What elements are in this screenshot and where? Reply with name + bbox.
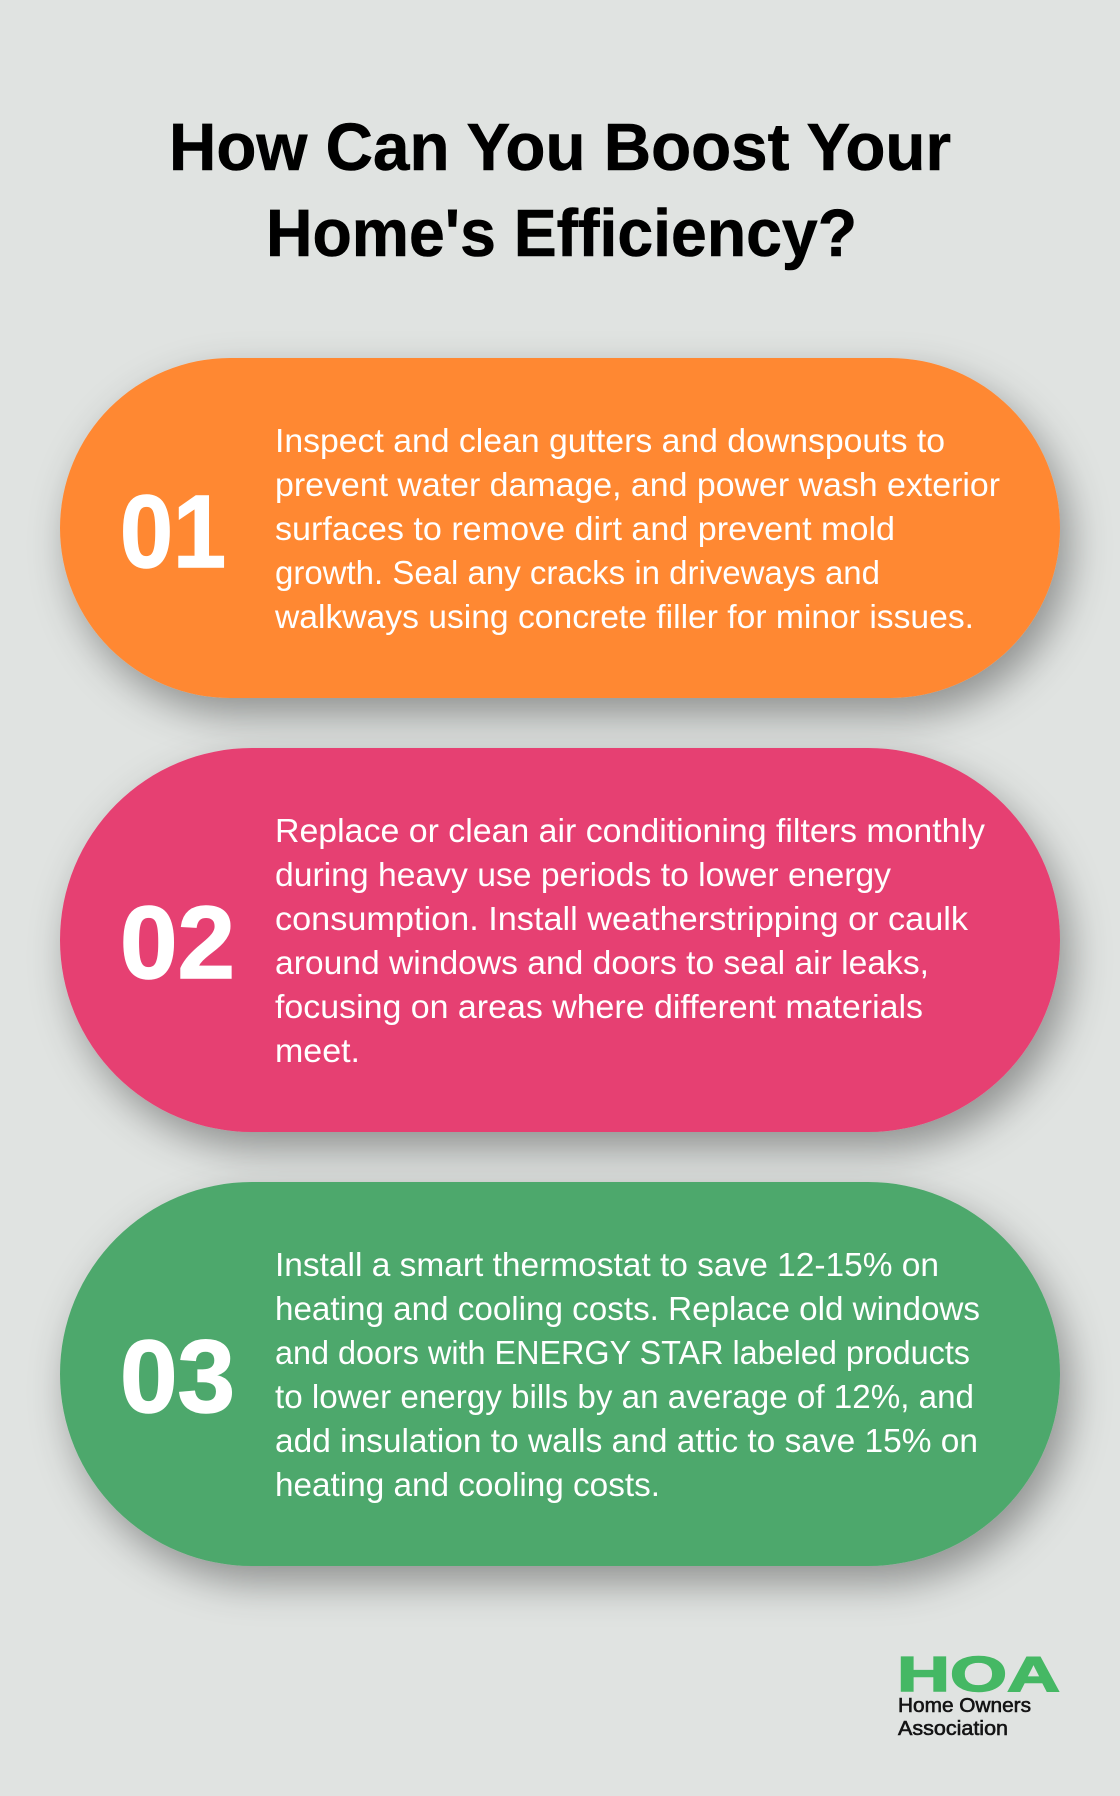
logo: Home Owners Association <box>897 1648 1060 1740</box>
text: step 02 description: during heavy use periods to lower energy <box>275 856 892 893</box>
text: step 02 description: around windows and doors to seal air leaks, <box>275 944 929 981</box>
title: How Can You Boost Your <box>169 110 951 185</box>
pill: step 01 background <box>60 358 1060 698</box>
text: step 01 description: walkways using concrete filler for minor issues. <box>274 598 974 635</box>
text: step 02 description: Replace or clean air conditioning filters monthly <box>275 812 985 849</box>
text: step 03 description: heating and cooling costs. Replace old windows <box>275 1290 980 1327</box>
logo caption <box>898 1695 1031 1740</box>
text: step 02 description <box>275 812 985 1069</box>
panel: step 01 <box>60 358 1060 698</box>
text: step 03 description: to lower energy bills by an average of 12%, and <box>275 1378 974 1415</box>
title <box>169 110 951 271</box>
text: step 03 description: heating and cooling costs. <box>275 1466 660 1503</box>
text: step 03 description: and doors with ENERGY STAR labeled products <box>275 1334 970 1371</box>
pill: step 03 background <box>60 1182 1060 1566</box>
number: 01: 01 <box>120 474 226 589</box>
panel: step 02 <box>60 748 1060 1132</box>
text: step 02 description: meet. <box>275 1032 360 1069</box>
text: step 03 description: Install a smart thermostat to save 12-15% on <box>275 1246 939 1283</box>
panel: step 03 <box>60 1182 1060 1566</box>
text: step 02 description: focusing on areas where different materials <box>275 988 923 1025</box>
text: step 03 description: add insulation to walls and attic to save 15% on <box>275 1422 978 1459</box>
text: step 02 description: consumption. Install weatherstripping or caulk <box>275 900 969 937</box>
logo caption: Association <box>898 1718 1008 1740</box>
text: step 01 description: growth. Seal any cracks in driveways and <box>275 554 880 591</box>
pill: step 02 background <box>60 748 1060 1132</box>
number: 03: 03 <box>120 1319 235 1434</box>
text: step 03 description <box>275 1246 980 1503</box>
text: step 01 description: surfaces to remove dirt and prevent mold <box>275 510 895 547</box>
number: 02: 02 <box>120 885 235 1000</box>
title: Home's Efficiency? <box>266 196 857 271</box>
text: step 01 description: Inspect and clean gutters and downspouts to <box>275 422 945 459</box>
text: step 01 description: prevent water damage, and power wash exterior <box>275 466 1000 503</box>
logo wordmark: HOA: HOA <box>897 1648 1060 1702</box>
text: step 01 description <box>274 422 1000 635</box>
logo caption: Home Owners <box>898 1695 1031 1717</box>
